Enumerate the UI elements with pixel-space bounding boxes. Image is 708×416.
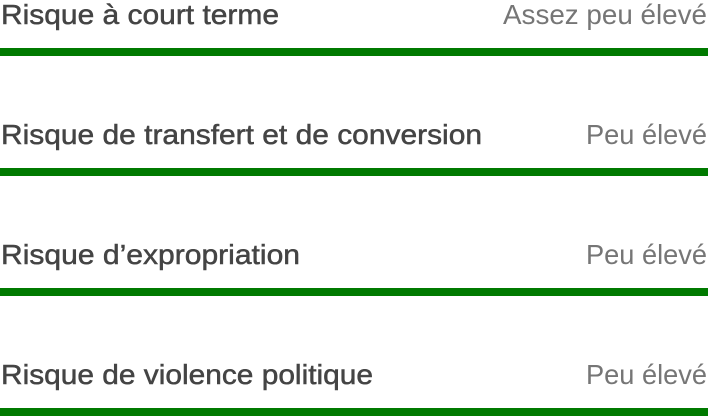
row: short-term risk: [0, 0, 708, 56]
label: transfer and conversion risk: Risque de transfert et de conversion: [1, 119, 482, 150]
row: transfer and conversion risk: [0, 119, 708, 176]
green bar: short-term risk: [0, 48, 708, 56]
rating: expropriation risk: Peu élevé: [586, 239, 707, 270]
green bar: expropriation risk: [0, 288, 708, 296]
rating: political violence risk: Peu élevé: [586, 359, 707, 390]
label: political violence risk: Risque de violence politique: [1, 359, 373, 390]
label: expropriation risk: Risque d’expropriation: [1, 239, 300, 270]
green bar: political violence risk: [0, 408, 708, 416]
green bar: transfer and conversion risk: [0, 168, 708, 176]
row: political violence risk: [0, 359, 708, 416]
rating: transfer and conversion risk: Peu élevé: [586, 119, 707, 150]
row: expropriation risk: [0, 239, 708, 296]
